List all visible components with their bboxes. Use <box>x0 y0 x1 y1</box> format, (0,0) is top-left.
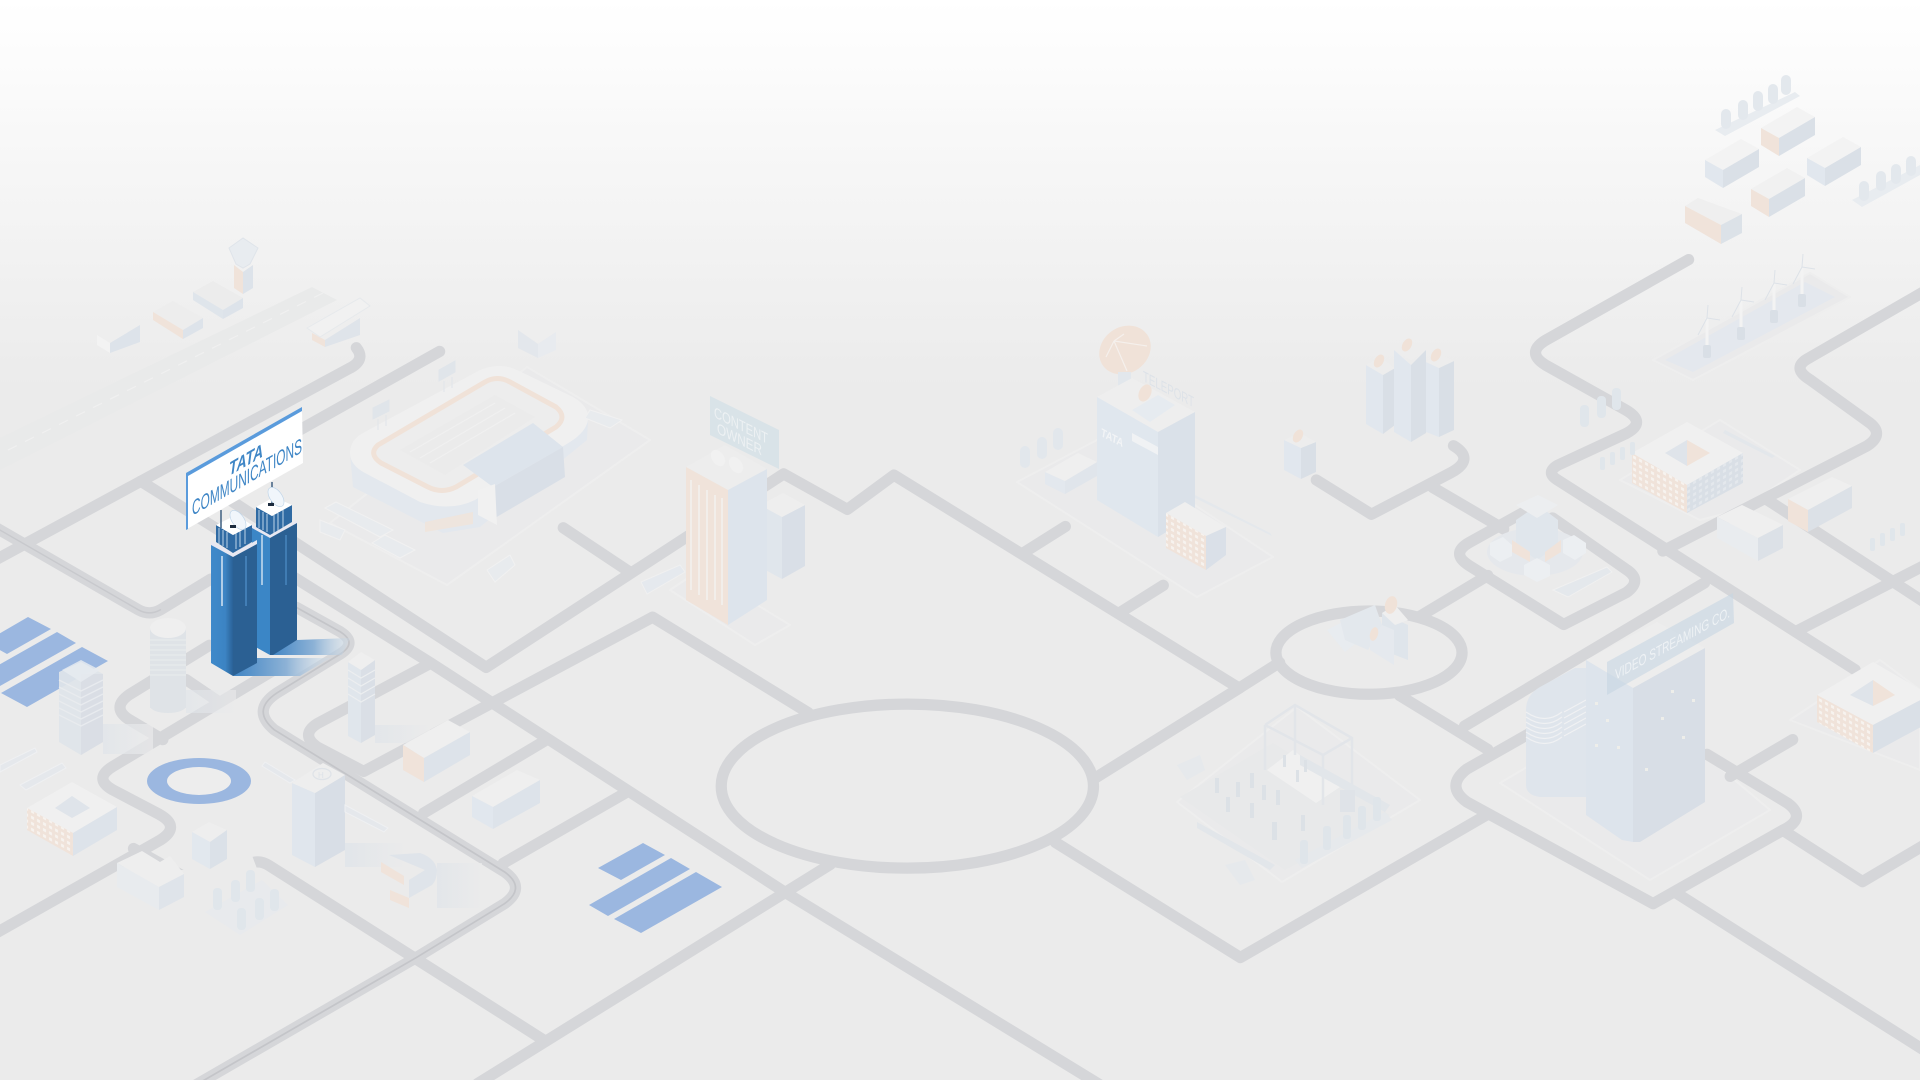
courtyard building left <box>27 782 117 856</box>
courtyard building right centre <box>1632 422 1775 513</box>
airport tower <box>229 238 258 294</box>
stadium floodlights <box>373 361 455 430</box>
cylinder building <box>150 618 236 713</box>
small cube building <box>192 822 227 869</box>
concert cooling row and vans <box>1177 755 1392 885</box>
white office right <box>1717 505 1783 561</box>
parking strips left <box>0 748 388 832</box>
blue office left 2 <box>472 770 540 829</box>
orange office left 1 <box>403 720 470 782</box>
Tata Communications front tower <box>211 508 257 676</box>
hub building inside block <box>1487 495 1612 597</box>
stadium parking and vans <box>320 410 622 582</box>
wind farm <box>1665 254 1835 372</box>
airport runway <box>0 287 337 470</box>
road cover near lower left cluster <box>170 850 265 935</box>
content owner sign: OWNER <box>717 421 762 459</box>
courtyard building far right <box>1817 662 1920 753</box>
content owner tower <box>641 445 767 625</box>
top right buildings cluster <box>1685 107 1861 244</box>
road network <box>0 260 1920 1080</box>
helipad tower <box>292 763 405 867</box>
stadium <box>350 366 588 533</box>
content owner sign <box>710 396 779 469</box>
booth near stadium <box>518 330 556 358</box>
video streaming cylinder wing <box>1526 668 1586 797</box>
solar panels: left <box>0 617 108 707</box>
airport terminal <box>307 298 370 347</box>
teleport sign text: TELEPORT <box>1143 369 1194 411</box>
orange office right <box>1788 477 1852 532</box>
airport small building <box>97 317 140 353</box>
video streaming tower <box>1586 622 1705 842</box>
ground pads <box>330 273 1920 882</box>
content owner sign: CONTENT <box>714 405 768 448</box>
Tata Communications billboard <box>186 407 303 530</box>
hangar 1 <box>193 281 243 319</box>
orange block at teleport <box>1166 495 1272 570</box>
Tata tower shadows <box>233 638 350 676</box>
cooling rows near road <box>1580 388 1905 551</box>
teleport tower <box>1097 378 1195 537</box>
slim tower <box>348 652 430 743</box>
concert stage <box>1180 705 1390 870</box>
Tata Communications back tower <box>252 482 297 655</box>
Tata Communications billboard: COMMUNICATIONS <box>192 433 302 521</box>
helipad tower: H <box>318 771 324 780</box>
building behind content owner <box>760 493 805 579</box>
hangar 2 <box>153 301 203 339</box>
video streaming sign <box>1607 593 1734 695</box>
top right cooling rows <box>1715 75 1920 207</box>
cooling units lower left <box>205 870 288 935</box>
solar panels: lower centre <box>589 843 722 933</box>
small satellite building <box>1284 428 1316 479</box>
satellite towers trio <box>1366 337 1454 442</box>
blue ring pad <box>147 758 251 804</box>
teleport dish <box>1090 316 1160 393</box>
white office lower left <box>117 851 184 910</box>
concert crowd <box>1215 755 1307 840</box>
teleport tower: TATA <box>1101 425 1123 450</box>
teleport low building and cooling <box>1020 428 1097 494</box>
curved building lower <box>381 853 482 908</box>
Tata Communications billboard: TATA <box>229 440 263 481</box>
data centre inside oval <box>1327 595 1408 665</box>
video streaming sign: VIDEO STREAMING CO. <box>1615 604 1730 684</box>
striped tower overlapping panels <box>59 660 153 755</box>
